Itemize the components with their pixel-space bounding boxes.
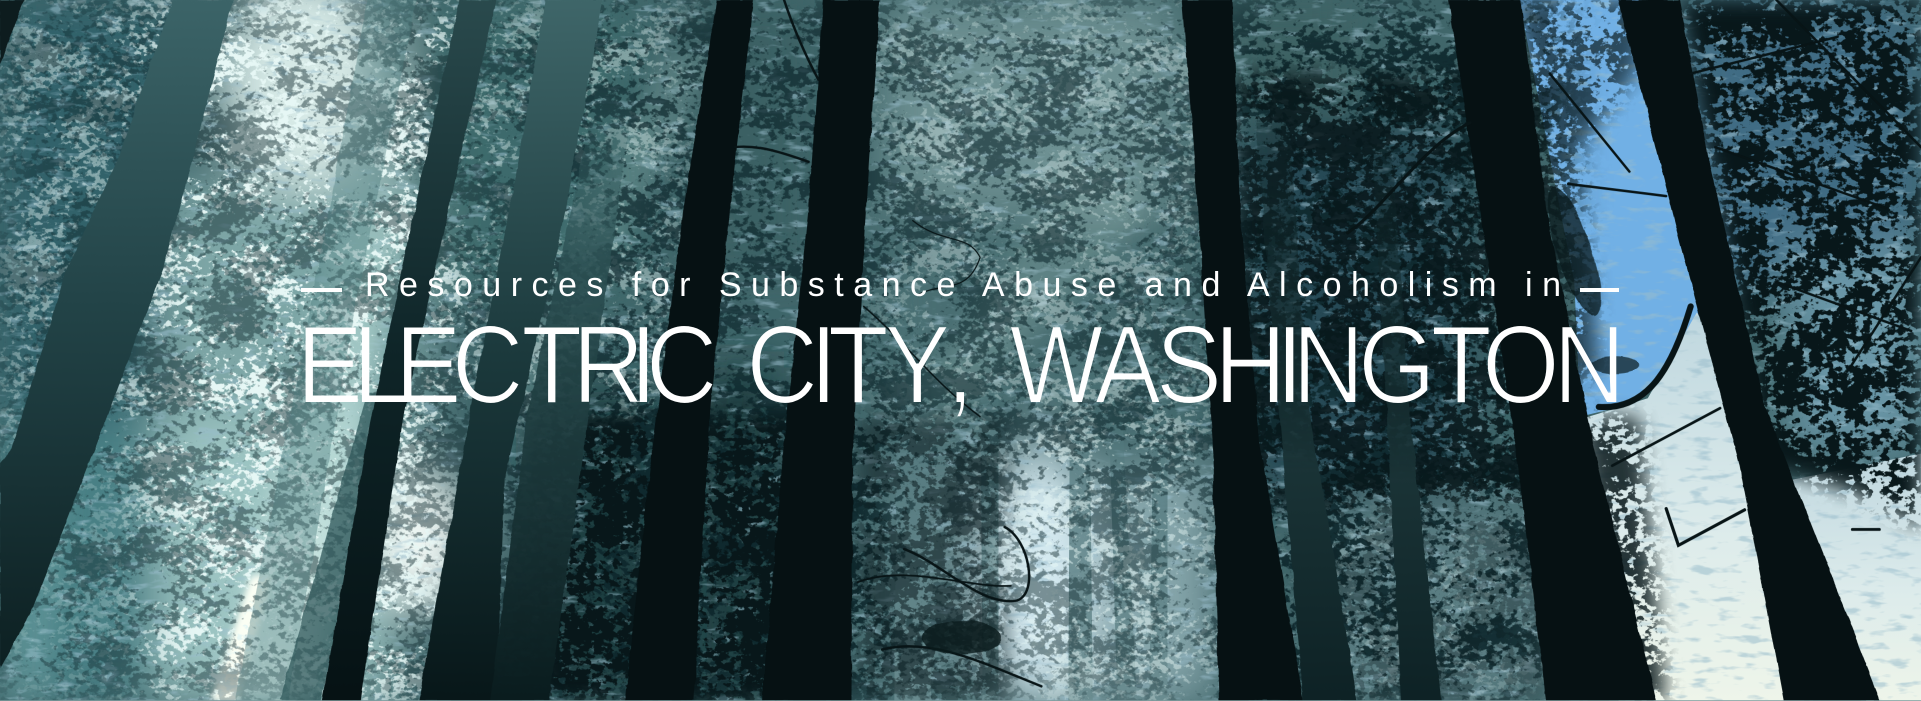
subtitle text: Resources for Substance Abuse and Alcoholism in	[365, 266, 1561, 304]
bottom edge	[0, 699, 1921, 701]
distant pale trunks	[894, 245, 1168, 701]
subtitle	[301, 266, 1619, 304]
title: ELECTRIC CITY, WASHINGTON	[296, 303, 1625, 427]
light beams through fog	[0, 0, 1152, 701]
right conifer foliage	[549, 0, 1921, 701]
branches	[735, 0, 1921, 686]
sky and snow slope	[1519, 0, 1921, 701]
mid-distance tree trunks	[0, 0, 1441, 701]
left dash	[301, 288, 342, 292]
pine sprays	[923, 182, 1639, 654]
right dash	[1580, 288, 1619, 292]
bright sun flare	[211, 576, 272, 701]
